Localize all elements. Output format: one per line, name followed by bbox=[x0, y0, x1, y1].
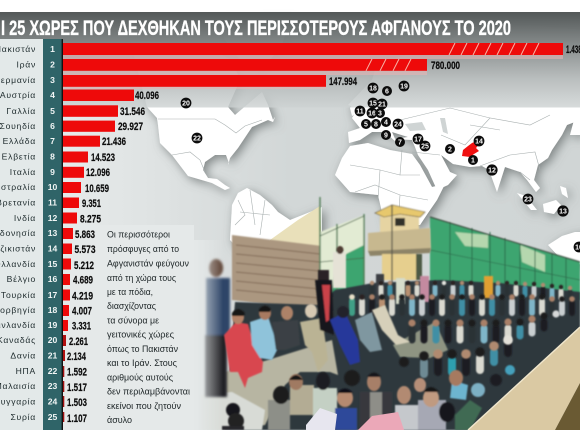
text block: refugees paragraph: πρόσφυγες από το bbox=[107, 243, 179, 254]
text block: refugees paragraph: δεν περιλαμβάνονται bbox=[107, 386, 190, 396]
row 10: 10 bbox=[48, 182, 57, 192]
row 20: 2.261 bbox=[69, 336, 88, 348]
marker group: country ranks: 4 bbox=[384, 120, 388, 126]
land: eurasia bbox=[346, 96, 580, 198]
row 22: ΗΠΑ bbox=[16, 366, 36, 376]
marker group: country ranks: 17 bbox=[414, 136, 422, 144]
row 23: 23 bbox=[48, 381, 57, 391]
row 18: 4.007 bbox=[72, 306, 92, 318]
land: borneo bbox=[543, 200, 561, 214]
row 16: 4.689 bbox=[73, 274, 93, 286]
row 9: Ιταλία bbox=[10, 167, 36, 177]
seas: black sea and caspian bbox=[405, 118, 448, 134]
row 21: 21 bbox=[48, 350, 57, 360]
row 18: 18 bbox=[48, 305, 57, 315]
photo fade into background bbox=[193, 240, 223, 430]
land: south america bbox=[230, 188, 322, 250]
row 23 bbox=[0, 381, 87, 394]
marker group: country ranks: 23 bbox=[524, 196, 532, 204]
axis line bbox=[62, 39, 63, 430]
row 17: 4.219 bbox=[72, 290, 93, 302]
brick wall bbox=[232, 235, 322, 310]
row 12: 12 bbox=[48, 213, 57, 223]
row 8 bbox=[2, 152, 115, 164]
marker group: country ranks: 2 bbox=[448, 146, 452, 154]
text block: refugees paragraph: γειτονικές χώρες bbox=[107, 328, 174, 340]
marker group: country ranks: 1 bbox=[471, 158, 475, 164]
row 15 bbox=[0, 258, 94, 272]
faded man standing at left bbox=[205, 259, 230, 397]
row 11 bbox=[0, 198, 101, 210]
row 7: 21.436 bbox=[102, 136, 126, 148]
land: africa bbox=[335, 143, 445, 225]
standing figures, back row bbox=[318, 246, 493, 304]
panel: world map bbox=[63, 86, 580, 430]
row 7 bbox=[3, 136, 126, 148]
row 20: 20 bbox=[48, 335, 57, 345]
panel: photo of the crowd at the airport bbox=[193, 197, 580, 430]
row 5: 31.546 bbox=[120, 106, 145, 118]
marker group: country ranks: 14 bbox=[475, 138, 483, 146]
text block: refugees paragraph: διασχίζοντας bbox=[107, 300, 156, 311]
row 1 bbox=[0, 43, 580, 56]
marker group: country ranks: 20 bbox=[182, 100, 190, 108]
row 9 bbox=[10, 167, 110, 179]
row 15: 5.212 bbox=[74, 260, 94, 272]
text block: refugees paragraph: εκείνοι που ζητούν bbox=[107, 400, 181, 411]
row 14 bbox=[0, 244, 96, 256]
row 5: 5 bbox=[50, 106, 55, 116]
right green fence bbox=[430, 217, 580, 300]
marker group: country ranks: 3 bbox=[378, 110, 382, 118]
row 19 bbox=[0, 320, 91, 332]
marker group: country ranks: 8 bbox=[374, 122, 378, 128]
row 17: 17 bbox=[48, 290, 57, 300]
row 12: Ινδία bbox=[14, 213, 36, 223]
land: philippines bbox=[560, 186, 568, 198]
row 22: 1.592 bbox=[67, 366, 87, 378]
marker group: country ranks: 13 bbox=[559, 208, 567, 216]
marker group: country ranks: 19 bbox=[400, 84, 408, 90]
marker group: country ranks: 6 bbox=[385, 88, 389, 96]
marker group: country ranks: 15 bbox=[369, 100, 377, 108]
marker group: country ranks: 11 bbox=[356, 108, 364, 116]
guard tower bbox=[368, 205, 431, 285]
text block: refugees paragraph: από τη χώρα τους bbox=[107, 272, 176, 283]
row 20 bbox=[0, 335, 88, 348]
seated people on the rock bbox=[224, 280, 410, 388]
marker group: country ranks: 18 bbox=[369, 86, 377, 92]
row 11: 9.351 bbox=[82, 198, 101, 210]
row 16: Βέλγιο bbox=[7, 274, 36, 284]
row 9: 9 bbox=[50, 167, 55, 177]
text background panel bbox=[64, 225, 194, 430]
row 17 bbox=[1, 290, 93, 302]
row 2: 2 bbox=[50, 60, 55, 70]
row 13: 5.863 bbox=[75, 229, 95, 241]
country borders bbox=[158, 108, 550, 235]
crowd people, lower centre bbox=[222, 370, 482, 430]
row 18 bbox=[0, 305, 92, 318]
text block: refugees paragraph: άσυλο bbox=[107, 414, 132, 425]
row 6: Σουηδία bbox=[0, 121, 36, 131]
row 13: 13 bbox=[48, 228, 57, 238]
land: sumatra bbox=[517, 193, 537, 210]
marker group: country ranks: 16 bbox=[368, 110, 376, 118]
row 2: Ιράν bbox=[16, 60, 36, 70]
marker group: country ranks: 12 bbox=[488, 168, 496, 174]
rock ledge bbox=[200, 322, 448, 430]
row 7: Ελλάδα bbox=[3, 136, 36, 146]
row 24 bbox=[0, 396, 87, 409]
marker group: country ranks: 9 bbox=[384, 132, 388, 140]
row 16 bbox=[7, 274, 93, 286]
marker group: country ranks: 5 bbox=[364, 122, 368, 128]
row 4 bbox=[0, 90, 159, 102]
label column background bbox=[0, 39, 43, 430]
row 25: 25 bbox=[48, 412, 57, 422]
marker group: country ranks: 21 bbox=[378, 102, 386, 108]
text block: refugees paragraph: αριθμούς αυτούς bbox=[107, 372, 173, 382]
row 4: Αυστρία bbox=[0, 90, 36, 100]
text block: refugees paragraph: και το Ιράν. Στους bbox=[107, 357, 177, 368]
marker group: country ranks: 7 bbox=[398, 140, 402, 146]
row 14: 5.573 bbox=[74, 244, 96, 256]
row 8: 8 bbox=[50, 152, 55, 162]
row 12 bbox=[14, 212, 101, 226]
row 7: 7 bbox=[50, 136, 55, 146]
crowd heads and bodies, upper right bbox=[352, 287, 572, 374]
row 17: Τουρκία bbox=[1, 290, 36, 300]
row 1: 1 bbox=[50, 44, 55, 54]
row 6: 6 bbox=[50, 121, 55, 131]
person in pink bbox=[224, 322, 263, 388]
row 2 bbox=[16, 59, 460, 72]
row 21: 2.134 bbox=[67, 351, 87, 363]
row 21 bbox=[10, 350, 87, 363]
marker group: country ranks: 25 bbox=[421, 144, 429, 150]
row 3: 147.994 bbox=[329, 76, 358, 88]
left fence bbox=[320, 197, 364, 300]
row 21: Δανία bbox=[10, 350, 36, 360]
text block: refugees paragraph bbox=[107, 228, 190, 425]
row 14: 14 bbox=[48, 244, 57, 254]
row 10 bbox=[0, 182, 109, 195]
marker group: country ranks: 24 bbox=[394, 122, 402, 128]
land: north america bbox=[144, 89, 280, 197]
row 3: 3 bbox=[50, 75, 55, 85]
land: uk bbox=[349, 106, 356, 120]
map markers bbox=[181, 81, 580, 252]
row 5: Γαλλία bbox=[6, 106, 36, 116]
row 8: 14.523 bbox=[91, 152, 115, 164]
row 15: 15 bbox=[48, 259, 57, 269]
row 5 bbox=[6, 105, 145, 118]
row 24: 1.503 bbox=[67, 397, 87, 409]
row 8: Ελβετία bbox=[2, 152, 36, 162]
land: japan bbox=[570, 118, 580, 135]
text block: refugees paragraph: Οι περισσότεροι bbox=[107, 228, 170, 240]
row 4: 40.096 bbox=[135, 90, 159, 102]
row 9: 12.096 bbox=[86, 167, 110, 179]
marker group: country ranks bbox=[181, 81, 580, 252]
row 11: 11 bbox=[48, 198, 57, 208]
gaps between top bars bbox=[63, 55, 563, 89]
hatch on bars bbox=[366, 43, 539, 71]
concrete wall in foreground bbox=[468, 327, 580, 430]
land: greenland bbox=[215, 18, 290, 70]
row 22: 22 bbox=[48, 366, 57, 376]
row 25: Συρία bbox=[10, 412, 36, 422]
text block: refugees paragraph: όπως το Πακιστάν bbox=[107, 343, 178, 354]
header gradient band bbox=[0, 12, 580, 108]
row 23: 1.517 bbox=[67, 382, 87, 394]
land: australia bbox=[548, 232, 580, 266]
row 4: 4 bbox=[50, 90, 55, 100]
row 25: 1.107 bbox=[67, 413, 87, 425]
row 24: 24 bbox=[48, 396, 57, 406]
afghanistan highlighted bbox=[462, 141, 480, 157]
row 3 bbox=[0, 75, 358, 88]
row 6 bbox=[0, 121, 143, 133]
row 19: 19 bbox=[48, 320, 57, 330]
row 19: 3.331 bbox=[72, 320, 91, 332]
crowd heads bbox=[349, 281, 575, 397]
row 16: 16 bbox=[48, 274, 57, 284]
marker group: country ranks: 22 bbox=[193, 136, 201, 142]
row 22 bbox=[16, 366, 87, 378]
row 25 bbox=[10, 412, 87, 425]
beige land tint bbox=[270, 206, 322, 250]
row 6: 29.927 bbox=[118, 121, 143, 133]
row 13 bbox=[0, 228, 95, 241]
paper and pink scarf in foreground bbox=[306, 408, 404, 430]
text block: refugees paragraph: με τα πόδια, bbox=[107, 286, 153, 297]
row 12: 8.275 bbox=[80, 214, 101, 226]
row 10: 10.659 bbox=[85, 183, 109, 195]
crowd base bbox=[225, 280, 580, 430]
row 2: 780.000 bbox=[431, 60, 460, 72]
rank column bbox=[43, 39, 62, 430]
text block: refugees paragraph: τα σύνορα με bbox=[107, 314, 159, 326]
text block: refugees paragraph: Αφγανιστάν φεύγουν bbox=[107, 258, 189, 268]
